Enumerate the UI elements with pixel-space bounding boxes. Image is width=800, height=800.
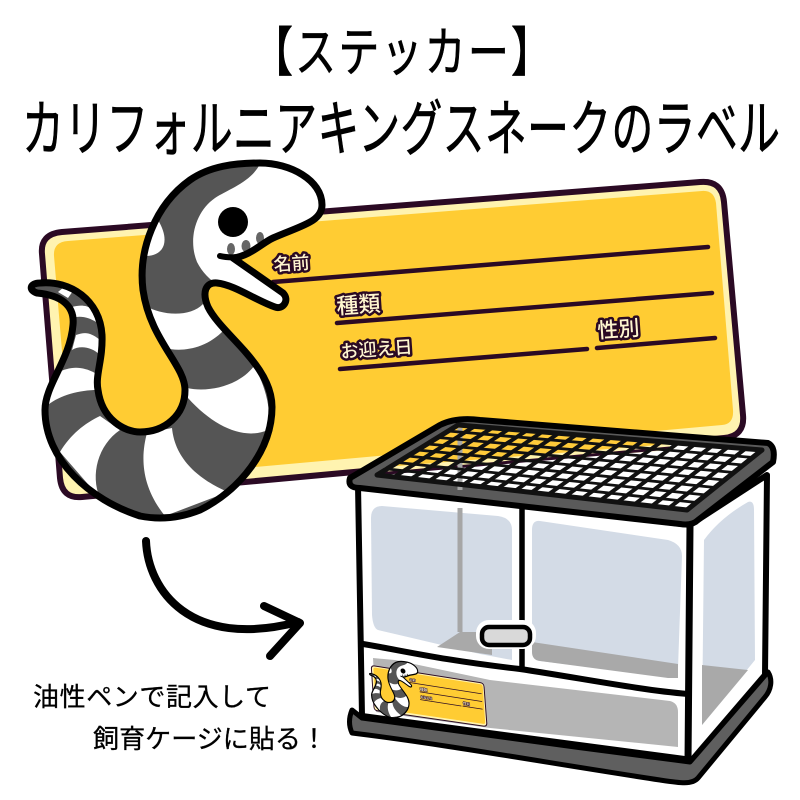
title line 2: カリフォルニアキングスネークのラベル [22, 96, 780, 164]
mini sticker on cage [367, 651, 487, 742]
field labels [273, 253, 640, 362]
field labels: 名前 [273, 253, 310, 275]
panel: yellow label [42, 182, 743, 497]
caption line 1: 油性ペンで記入して [33, 682, 271, 712]
field labels: お迎え日 [340, 337, 413, 362]
field labels: 性別 [597, 317, 640, 343]
title line 1: 【ステッカー】 [252, 24, 552, 83]
sticker artwork [20, 150, 743, 530]
glass panes [371, 502, 755, 725]
title [22, 24, 780, 164]
cage base [350, 672, 771, 783]
snake eye [218, 207, 248, 237]
rear post [458, 508, 462, 632]
snake [20, 150, 340, 530]
field labels: 種類 [336, 291, 381, 319]
mesh [377, 425, 762, 510]
cage floor shading [437, 632, 748, 725]
cage body [358, 475, 767, 760]
snake teeth [227, 232, 264, 255]
cage lid [349, 419, 774, 524]
caption [33, 682, 327, 754]
arrow [146, 541, 300, 656]
cage [349, 419, 774, 783]
door handle [476, 620, 536, 649]
caption line 2: 飼育ケージに貼る！ [93, 724, 327, 754]
lower panel [373, 658, 678, 747]
write-in lines [273, 247, 715, 369]
lower rail and posts [363, 508, 690, 762]
